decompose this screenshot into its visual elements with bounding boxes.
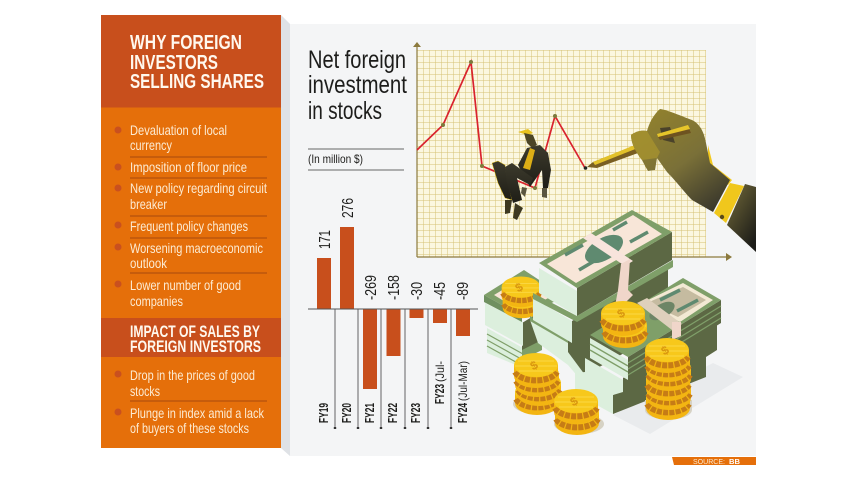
bar chart — [308, 198, 478, 428]
bar values: 171 — [317, 230, 334, 249]
title: net foreign investment in stocks: Net foreign — [308, 46, 406, 74]
line chart data points — [469, 60, 557, 190]
fiscal year labels — [317, 361, 470, 423]
list: reasons for selling: Worsening macroeconomic — [130, 240, 263, 256]
list: reasons for selling: New policy regarding circuit — [130, 180, 267, 196]
heading: why foreign investors: INVESTORS — [130, 52, 218, 74]
title: net foreign investment in stocks — [308, 46, 407, 125]
list: reasons for selling: Imposition of floor price — [130, 159, 247, 175]
coin stack behind bundle — [502, 276, 541, 318]
panel: grey background — [281, 15, 756, 456]
bar values: -30 — [409, 282, 426, 300]
list: reasons for selling: breaker — [130, 196, 167, 212]
unit label: (In million $) — [308, 152, 363, 166]
heading: why foreign investors: SELLING SHARES — [130, 71, 264, 93]
main bundle — [530, 210, 673, 385]
fiscal year labels: FY23 — [409, 403, 423, 423]
heading: impact of sales: FOREIGN INVESTORS — [130, 337, 261, 356]
left bundle — [484, 270, 565, 368]
fiscal year labels: FY21 — [363, 403, 377, 423]
list: impacts: Plunge in index amid a lack — [130, 405, 265, 421]
coin stack behind bundle: $ — [513, 280, 526, 295]
list: reasons for selling: currency — [130, 137, 172, 153]
coin stack on front bundle: $ — [615, 306, 628, 321]
heading: why foreign investors — [130, 32, 264, 93]
bar values: -158 — [386, 275, 403, 300]
unit label — [308, 149, 404, 170]
tall coin stack: $ — [659, 343, 672, 358]
list: reasons for selling — [114, 122, 267, 309]
tall coin stack — [645, 338, 692, 420]
title: net foreign investment in stocks: in stocks — [308, 97, 382, 125]
list: impacts: of buyers of these stocks — [130, 420, 249, 436]
fiscal year labels: FY22 — [386, 403, 400, 423]
fiscal year labels: (Jul-Mar) — [456, 361, 470, 401]
panel: causes and impact sidebar — [101, 15, 281, 448]
list: reasons for selling: outlook — [130, 255, 168, 271]
heading: why foreign investors: WHY FOREIGN — [130, 32, 242, 54]
bar values: -89 — [455, 282, 472, 300]
left coin stack — [513, 353, 561, 415]
list: reasons for selling: Frequent policy changes — [130, 218, 248, 234]
red trend line — [417, 62, 585, 188]
list: reasons for selling: companies — [130, 293, 183, 309]
heading: impact of sales — [130, 322, 261, 356]
heading: impact of sales: IMPACT OF SALES BY — [130, 322, 260, 341]
list: impacts — [114, 367, 265, 436]
source tag — [672, 457, 756, 466]
fiscal year labels: FY24 — [456, 403, 470, 423]
bar values: -45 — [432, 282, 449, 300]
front bundle — [575, 278, 721, 414]
coin stack on front bundle — [601, 301, 647, 348]
fiscal year labels: FY19 — [317, 403, 331, 423]
bar values: 276 — [340, 198, 357, 218]
front coin stack: $ — [568, 394, 581, 409]
bar values: -269 — [363, 275, 380, 300]
list: reasons for selling: Devaluation of local — [130, 122, 227, 138]
fiscal year labels: FY23 — [433, 384, 447, 404]
front coin stack — [554, 389, 604, 435]
bar values — [317, 198, 472, 300]
source tag: BB — [729, 457, 741, 466]
title: net foreign investment in stocks: investment — [308, 71, 407, 99]
fiscal year labels: (Jul- — [433, 361, 447, 382]
fiscal year labels: FY20 — [340, 403, 354, 423]
list: impacts: stocks — [130, 383, 160, 399]
list: impacts: Drop in the prices of good — [130, 367, 255, 383]
icon: falling businessman — [492, 129, 551, 220]
icon: hand with pencil — [584, 109, 756, 252]
icon: money stacks and coins — [484, 210, 743, 435]
left coin stack: $ — [528, 358, 541, 373]
line chart on graph paper — [413, 42, 732, 261]
source tag: SOURCE: — [693, 457, 725, 466]
list: reasons for selling: Lower number of good — [130, 277, 241, 293]
